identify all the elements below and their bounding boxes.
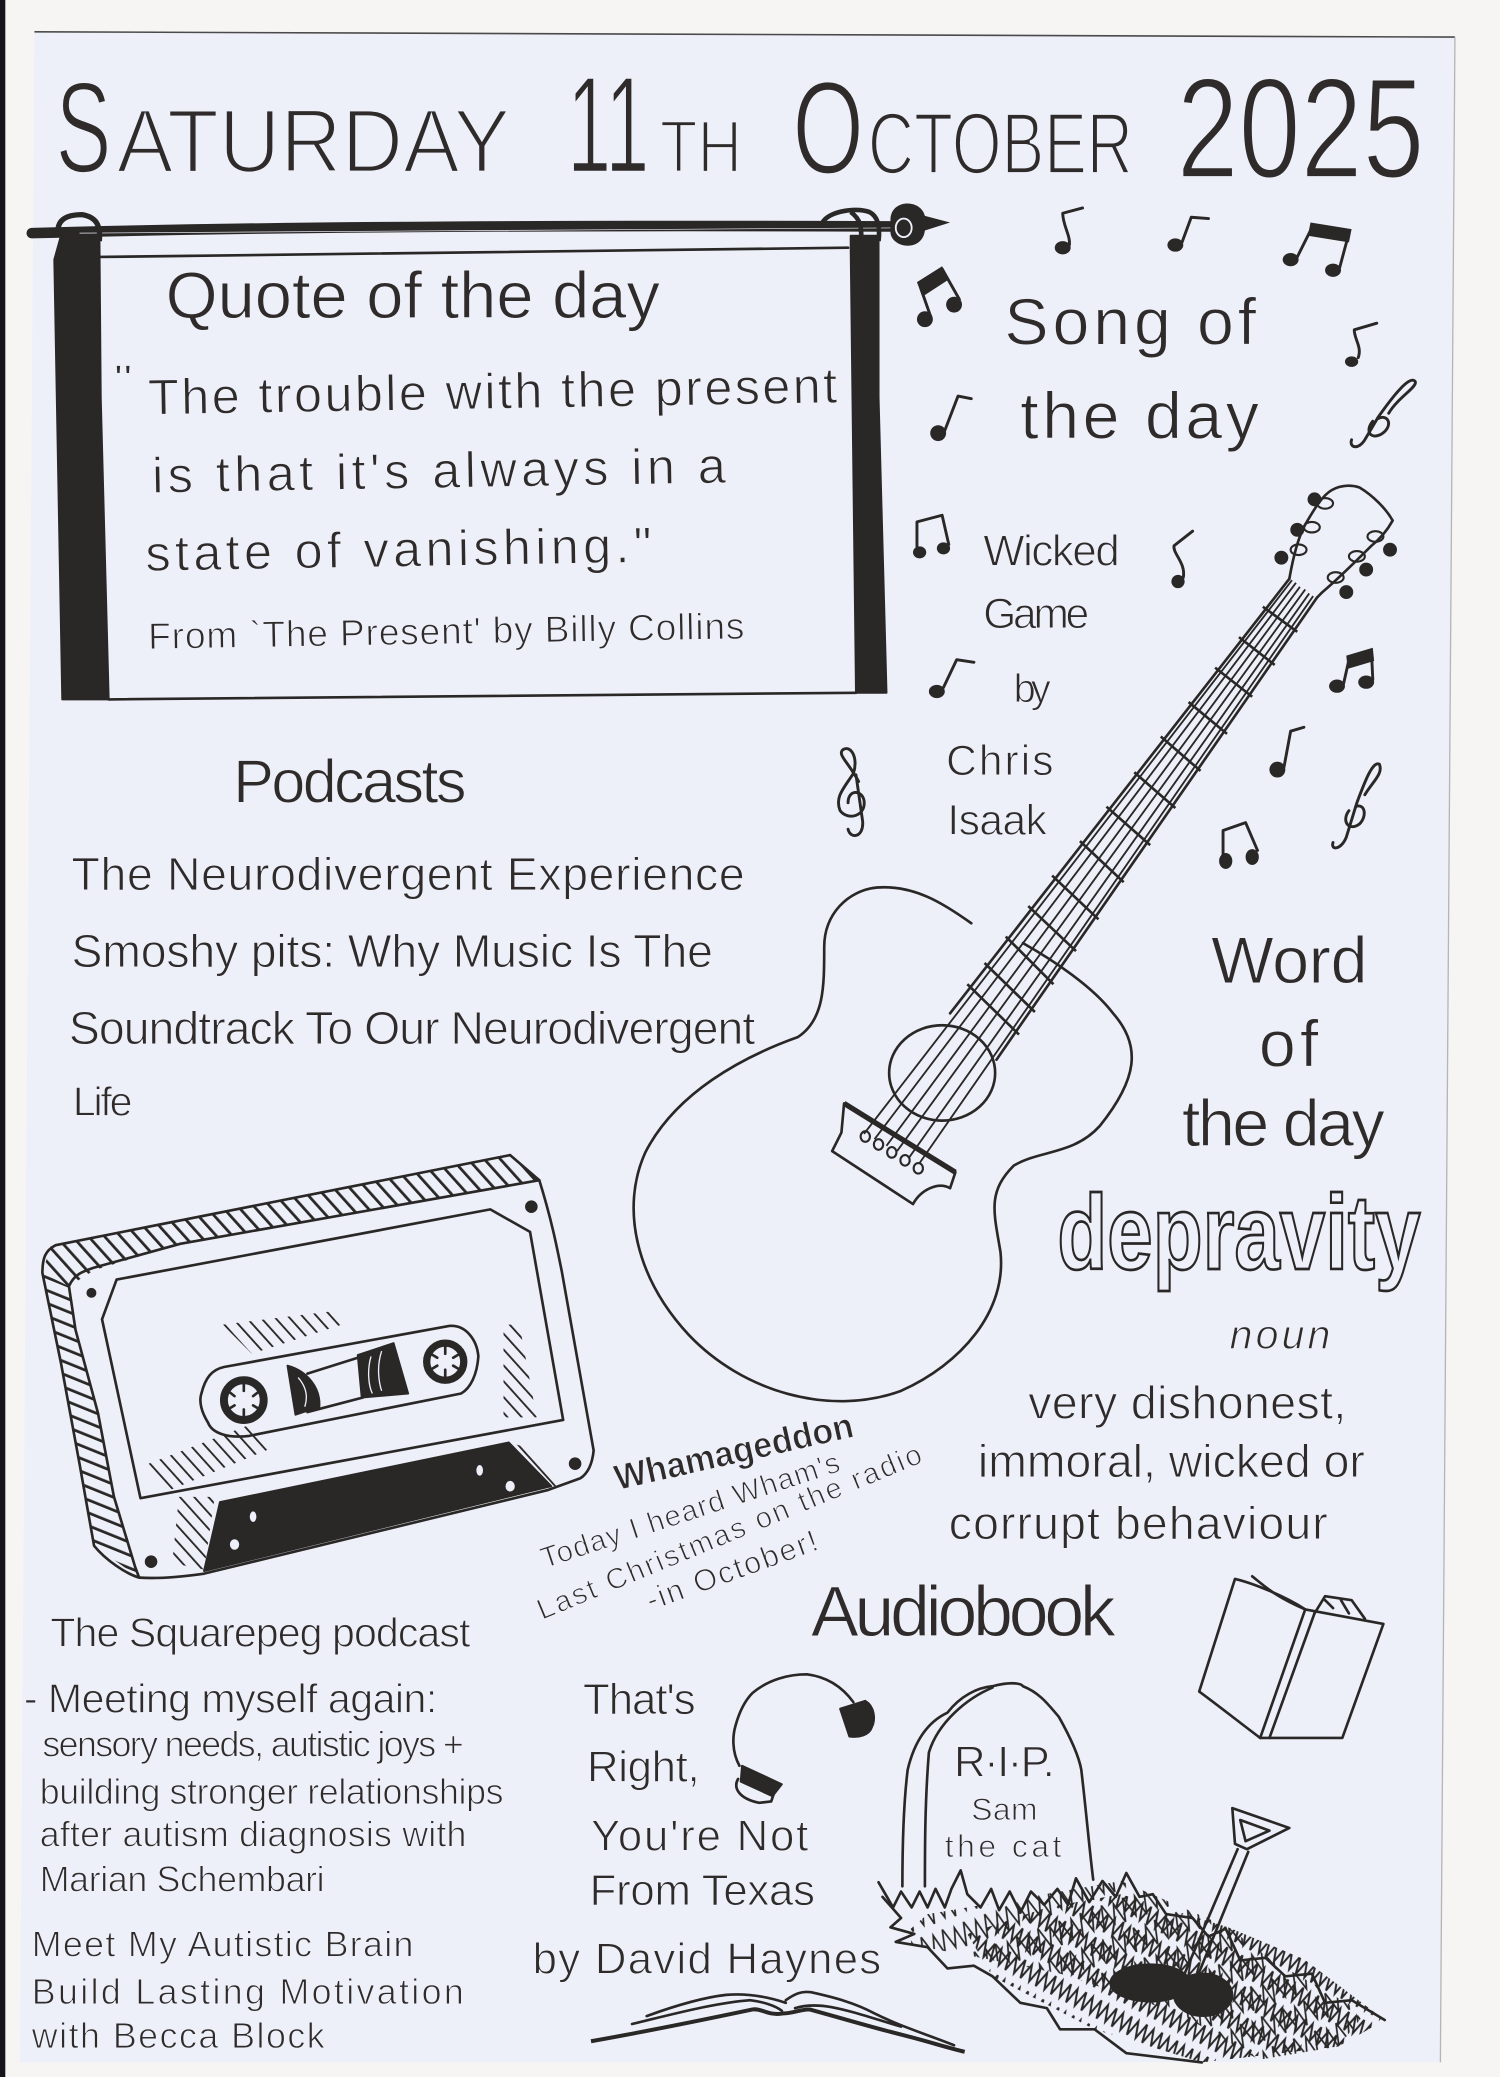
paper top shadow [34,32,1455,37]
spade grip hole [1240,1820,1269,1841]
right earcup [840,1701,874,1737]
frets [967,607,1297,1035]
word definition: corrupt behaviour [949,1497,1328,1549]
quote line 3: state of vanishing." [145,516,652,582]
tape reel left [288,1366,319,1415]
reel highlights [298,1351,382,1407]
audiobook text: by David Haynes [533,1935,881,1984]
book leaves [1252,1576,1365,1619]
icon: gravestone: Sam [971,1791,1038,1827]
whamageddon note: Today I heard Wham's [537,1447,844,1575]
song title and artist [946,527,1120,844]
neck edges [950,579,1317,1060]
song title and artist: Isaak [947,797,1048,844]
book bottom edge [591,2009,965,2052]
autistic brain podcast text: Build Lasting Motivation [32,1972,464,2012]
podcast text: Life [73,1078,133,1124]
word of the day heading: Word [1211,924,1367,998]
tape reel right [358,1343,408,1397]
autistic brain podcast text [31,1924,464,2056]
podcast text: Soundtrack To Our Neurodivergent [69,1002,755,1054]
song of the day heading: Song of [1004,285,1257,359]
icon: headphones [733,1674,874,1803]
dug earth blob right [1174,1974,1232,2016]
spool window [200,1326,478,1437]
podcast text [69,848,755,1124]
title: 11 [567,48,649,202]
word type: noun [1230,1311,1330,1357]
sound hole [889,1025,995,1121]
stone inner edge [925,1688,992,1886]
left roller [54,234,109,699]
squarepeg podcast text: after autism diagnosis with [40,1815,466,1855]
audiobook text: That's [583,1675,696,1724]
word of the day heading: the day [1182,1087,1385,1161]
tuning posts [1291,498,1383,583]
quote attribution: From `The Present' by Billy Collins [148,605,745,657]
rod highlight [80,228,901,233]
whamageddon note: -in October! [641,1524,822,1617]
squarepeg podcast text: building stronger relationships [40,1772,504,1812]
title: S [56,54,111,200]
audiobook text [533,1675,881,1984]
song title and artist: Chris [946,737,1053,784]
word definition: immoral, wicked or [978,1435,1365,1487]
song title and artist: Wicked [983,527,1120,576]
mound cross scribble [896,1881,1365,2060]
paper right edge [1440,37,1455,2062]
label window [102,1209,563,1498]
bridge [832,1103,955,1204]
right loop [822,210,879,241]
top hatch band [42,1155,539,1286]
song of the day heading: the day [1020,379,1259,453]
stone text: R·I·P. [954,1737,1055,1786]
podcasts heading: Podcasts [233,748,466,816]
treble clefs [1351,380,1415,447]
whamageddon note: Last Christmas on the radio [532,1439,927,1626]
stone outline [902,1683,1093,1886]
audiobook text: From Texas [590,1866,815,1915]
book right page [1260,1609,1383,1738]
word definition: very dishonest, [1028,1377,1346,1429]
rod finial [890,203,950,246]
window inner lines [307,1358,363,1412]
squarepeg podcast text: Marian Schembari [40,1860,325,1900]
squarepeg podcast text [24,1610,504,1900]
strings [864,580,1313,1163]
panel: quote of the day scroll [32,203,950,699]
curtain rod [32,226,909,233]
song title and artist: by [1014,667,1051,711]
title: TH [660,105,742,188]
book cover [1199,1579,1305,1738]
song of the day heading [1004,285,1259,453]
left spool [224,1380,264,1420]
podcast text: Smoshy pits: Why Music Is The [72,925,713,977]
dug earth blob [1110,1964,1190,2001]
guitar body [634,887,1132,1401]
podcast text: The Neurodivergent Experience [72,848,745,900]
screws [87,1201,580,1567]
scanner dark edge [0,0,5,2077]
icon: open book [591,1992,965,2052]
word of the day heading: of [1259,1007,1319,1081]
squarepeg podcast text: sensory needs, autistic joys + [42,1724,464,1764]
icon: grave mound [879,1808,1385,2062]
book spine [1269,1613,1314,1738]
finial highlight [896,219,912,237]
left hatch band [42,1273,139,1578]
quote heading: Quote of the day [166,259,660,333]
grass fringe [879,1870,1385,2020]
bridge pins [861,1131,923,1174]
left earcup ring [736,1779,774,1803]
autistic brain podcast text: with Becca Block [31,2016,325,2056]
audiobook text: Right, [587,1743,700,1792]
icon: gravestone [902,1683,1093,1886]
title: 2025 [1177,49,1424,208]
beamed notes [1283,223,1352,277]
icon: guitar [634,486,1396,1401]
bridge saddle [844,1103,955,1172]
panel holes [230,1465,515,1550]
title [56,48,1424,208]
opening quote mark: " [114,357,133,399]
single notes [1055,208,1083,254]
shading hatch [223,1311,342,1354]
bottom dark panel [204,1443,551,1571]
mound scribble [967,1894,1385,2062]
right roller [851,236,886,693]
audiobook heading: Audiobook [811,1572,1116,1652]
audiobook text: You're Not [591,1811,808,1860]
whamageddon note: Whamageddon [610,1405,857,1498]
headstock [1289,486,1393,597]
book pages [632,1992,954,2045]
spade shaft [1177,1849,1248,1995]
tuning pegs [1275,493,1396,598]
shell inner edge [69,1180,539,1578]
icon: cassette tape [42,1155,594,1578]
left loop [58,215,100,241]
squarepeg podcast text: - Meeting myself again: [24,1676,437,1722]
icon: reading book [1199,1576,1383,1738]
autistic brain podcast text: Meet My Autistic Brain [32,1924,413,1964]
quote line 2: is that it's always in a [152,437,726,504]
scroll frame [99,248,856,699]
word definition [949,1377,1365,1549]
title: ATURDAY [117,91,510,192]
song title and artist: Game [983,590,1089,637]
quote line 1: The trouble with the present [148,357,838,426]
shell outline [42,1155,594,1578]
icon: gravestone: the cat [945,1828,1062,1864]
word of the day heading [1182,924,1385,1161]
mound left edge [883,1897,1202,2062]
squarepeg podcast text: The Squarepeg podcast [50,1610,471,1655]
title: CTOBER [868,95,1133,193]
right spool [427,1343,464,1380]
icon: music notes [838,208,1415,869]
title: O [792,55,864,203]
left earcup band [741,1766,782,1796]
spade handle [1232,1808,1289,1849]
